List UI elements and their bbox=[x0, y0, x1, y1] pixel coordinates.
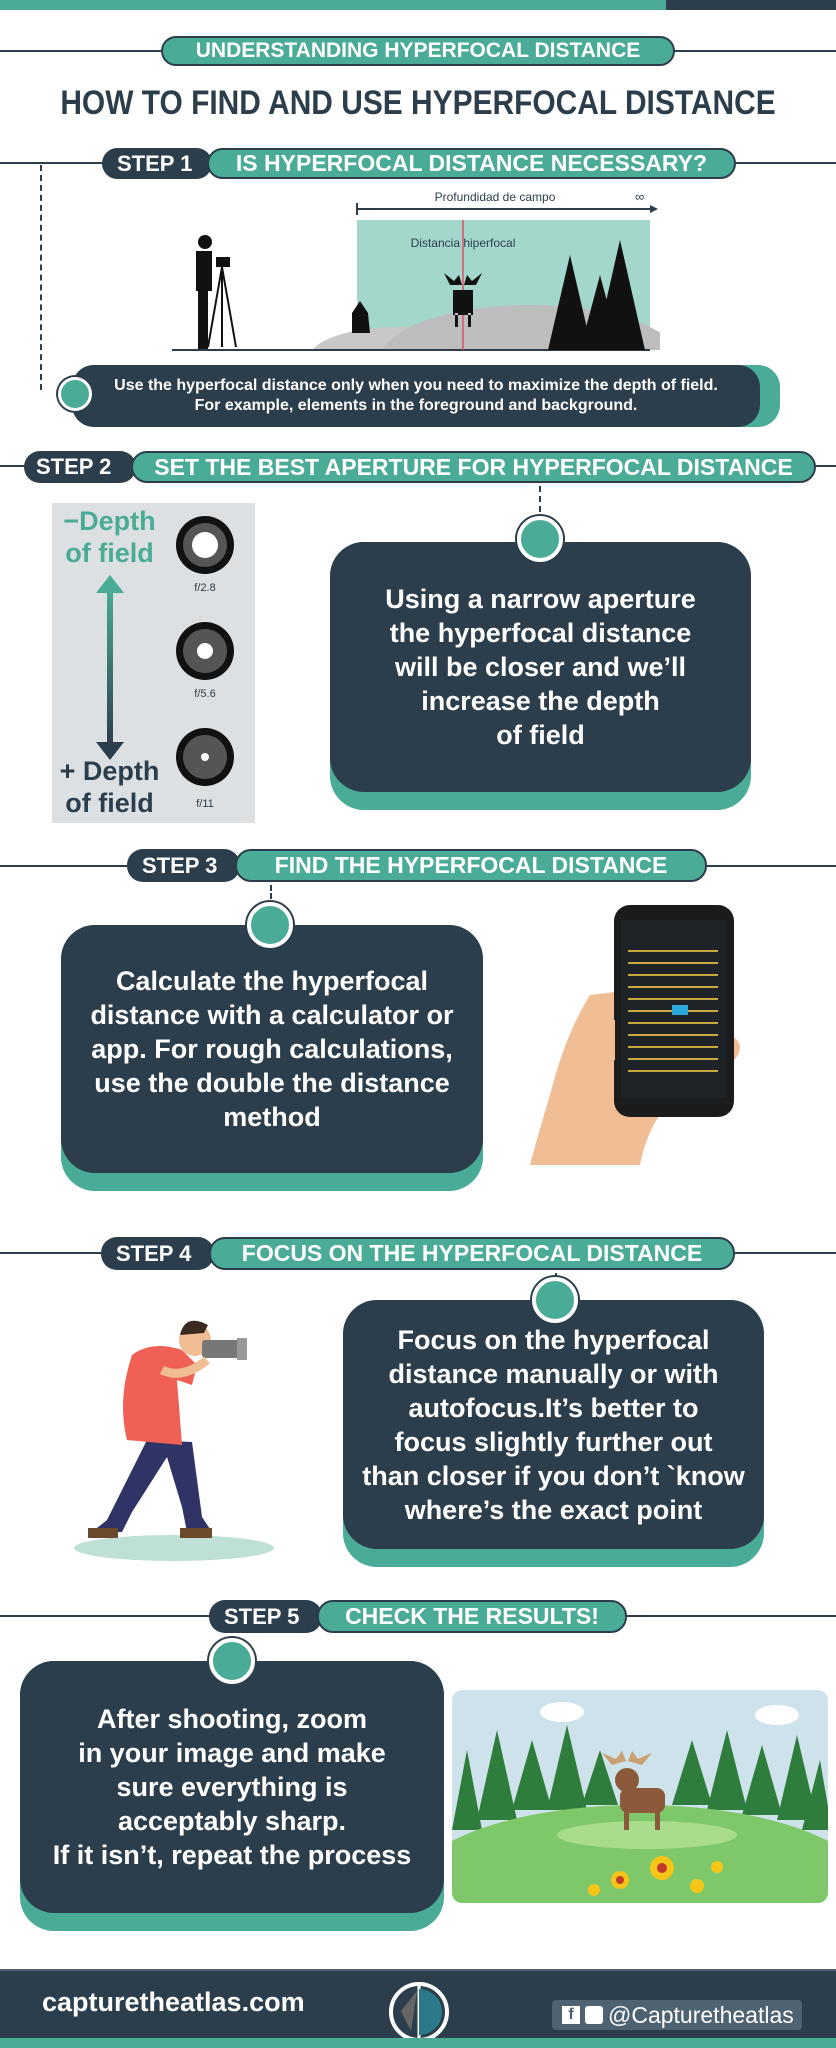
dot step3 bbox=[247, 902, 293, 948]
header pill: UNDERSTANDING HYPERFOCAL DISTANCE bbox=[196, 39, 640, 62]
dot step2 bbox=[517, 516, 563, 562]
dot step1 bbox=[58, 377, 92, 411]
step 2 box: increase the depth bbox=[421, 686, 660, 716]
step 4 header: FOCUS ON THE HYPERFOCAL DISTANCE bbox=[242, 1240, 702, 1266]
footer bbox=[0, 1969, 836, 2048]
step 3 box: use the double the distance bbox=[94, 1068, 450, 1098]
step 4 box bbox=[343, 1300, 764, 1567]
step 4 box: where’s the exact point bbox=[405, 1494, 702, 1524]
step 3 box: app. For rough calculations, bbox=[91, 1034, 453, 1064]
step 2 box: the hyperfocal distance bbox=[390, 618, 691, 648]
photographer illustration bbox=[74, 1320, 274, 1561]
step 5 box: in your image and make bbox=[78, 1738, 386, 1768]
header pill bbox=[161, 36, 675, 66]
step 3 header: FIND THE HYPERFOCAL DISTANCE bbox=[275, 852, 667, 878]
phone in hand bbox=[530, 905, 740, 1165]
step 1 header: IS HYPERFOCAL DISTANCE NECESSARY? bbox=[236, 150, 707, 176]
step 3 box: distance with a calculator or bbox=[90, 1000, 454, 1030]
bottom bar bbox=[0, 2038, 836, 2048]
step 1 callout bbox=[72, 365, 780, 427]
illustration: depth of field bbox=[172, 189, 660, 351]
footer social: f bbox=[568, 2006, 574, 2023]
aperture panel: of field bbox=[65, 788, 154, 818]
dot step4 bbox=[532, 1277, 578, 1323]
step 5 header bbox=[209, 1600, 627, 1633]
step 2 box: Using a narrow aperture bbox=[385, 584, 696, 614]
step 4 box: distance manually or with bbox=[388, 1358, 719, 1388]
title: HOW TO FIND AND USE HYPERFOCAL DISTANCE bbox=[60, 84, 776, 122]
illustration: depth of field: Profundidad de campo bbox=[435, 190, 556, 204]
step 5 box: sure everything is bbox=[116, 1772, 348, 1802]
step 5 header: CHECK THE RESULTS! bbox=[345, 1603, 599, 1629]
step 4 header bbox=[101, 1237, 735, 1270]
step 3 header bbox=[127, 849, 707, 882]
step 2 header bbox=[24, 451, 816, 483]
aperture panel: −Depth bbox=[63, 506, 156, 536]
step 4 box: Focus on the hyperfocal bbox=[397, 1324, 710, 1354]
step 1 callout: Use the hyperfocal distance only when you need to maximize the depth of field. bbox=[114, 377, 718, 394]
step 1 header bbox=[102, 148, 736, 179]
footer social bbox=[552, 2000, 802, 2030]
step 4 header: STEP 4 bbox=[116, 1240, 191, 1266]
step 3 header: STEP 3 bbox=[142, 852, 217, 878]
footer social: @Capturetheatlas bbox=[608, 2002, 794, 2028]
dot step5 bbox=[209, 1638, 255, 1684]
aperture panel: + Depth bbox=[60, 756, 159, 786]
aperture panel: f/2.8 bbox=[194, 582, 216, 594]
step 5 box: If it isn’t, repeat the process bbox=[53, 1840, 411, 1870]
footer url: capturetheatlas.com bbox=[42, 1987, 305, 2017]
step 2 header: STEP 2 bbox=[36, 454, 111, 479]
step 2 box bbox=[330, 542, 751, 810]
step 3 box bbox=[61, 925, 483, 1191]
step 4 box: autofocus.It’s better to bbox=[408, 1392, 698, 1422]
step 4 box: than closer if you don’t `know bbox=[362, 1460, 745, 1490]
illustration: depth of field: ∞ bbox=[635, 189, 644, 204]
aperture panel bbox=[52, 503, 255, 823]
illustration: depth of field: Distancia hiperfocal bbox=[411, 236, 515, 250]
step 5 header: STEP 5 bbox=[224, 1604, 299, 1628]
step 3 box: method bbox=[223, 1102, 321, 1132]
step 5 box: acceptably sharp. bbox=[118, 1806, 346, 1836]
step 1 header: STEP 1 bbox=[117, 150, 192, 176]
step 4 box: focus slightly further out bbox=[394, 1426, 712, 1456]
aperture panel: of field bbox=[65, 538, 154, 568]
aperture panel: f/5.6 bbox=[194, 688, 216, 700]
step 3 box: Calculate the hyperfocal bbox=[116, 966, 428, 996]
footer logo bbox=[389, 1982, 449, 2038]
step 2 header: SET THE BEST APERTURE FOR HYPERFOCAL DISTANCE bbox=[154, 454, 793, 480]
landscape photo bbox=[452, 1690, 828, 1903]
step 1 callout: For example, elements in the foreground and background. bbox=[195, 397, 637, 414]
step 2 box: of field bbox=[496, 720, 585, 750]
step 2 box: will be closer and we’ll bbox=[395, 652, 686, 682]
step 5 box bbox=[20, 1661, 444, 1931]
aperture panel: f/11 bbox=[196, 798, 214, 810]
step 5 box: After shooting, zoom bbox=[97, 1704, 367, 1734]
top bar bbox=[0, 0, 836, 10]
